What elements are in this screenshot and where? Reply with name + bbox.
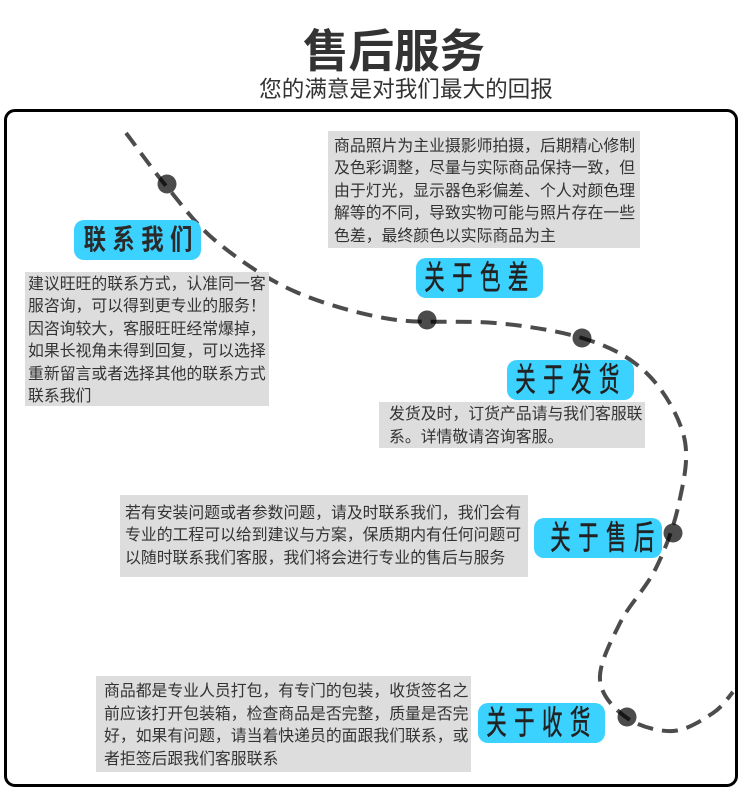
text block: receiving <box>96 676 471 772</box>
text block: contact us: 如果长视角未得到回复，可以选择 <box>28 343 266 360</box>
text block: receiving: 商品都是专业人员打包，有专门的包装，收货签名之 <box>104 683 468 700</box>
text block: contact us: 服咨询，可以得到更专业的服务！ <box>28 298 266 315</box>
badge: receiving: 关于收货 <box>486 704 597 741</box>
text block: receiving: 好，如果有问题，请当着快递员的面跟我们联系，或 <box>104 728 468 745</box>
text block: contact us: 建议旺旺的联系方式，认准同一客 <box>28 276 266 292</box>
text block: shipping: 发货及时，订货产品请与我们客服联 <box>389 406 643 422</box>
text block: colour difference: 解等的不同，导致实物可能与照片存在一些 <box>334 205 635 222</box>
text block: contact us: 重新留言或者选择其他的联系方式 <box>28 366 266 382</box>
text block: contact us: 联系我们 <box>28 388 91 405</box>
text block: colour difference: 色差，最终颜色以实际商品为主 <box>334 228 556 244</box>
text block: contact us <box>25 272 269 406</box>
text block: after-sales: 以随时联系我们客服，我们将会进行专业的售后与服务 <box>125 550 505 566</box>
text block: after-sales <box>120 495 528 577</box>
text block: colour difference <box>328 131 640 248</box>
text block: after-sales: 专业的工程可以给到建议与方案，保质期内有任何问题可 <box>125 527 521 544</box>
text block: after-sales: 若有安装问题或者参数问题，请及时联系我们，我们会有 <box>125 504 521 522</box>
text block: receiving: 前应该打开包装箱，检查商品是否完整，质量是否完 <box>104 706 468 722</box>
text block: shipping: 系。详情敬请咨询客服。 <box>389 428 563 446</box>
text block: colour difference: 及色彩调整，尽量与实际商品保持一致，但 <box>334 160 635 177</box>
subtitle: 您的满意是对我们最大的回报 <box>259 77 553 102</box>
badge: colour difference: 关于色差 <box>424 259 535 296</box>
title: 售后服务 <box>303 26 485 77</box>
badge: shipping: 关于发货 <box>515 361 626 398</box>
text block: shipping <box>379 402 645 448</box>
badge: after-sales: 关于售后 <box>550 519 661 556</box>
text block: colour difference: 商品照片为主业摄影师拍摄，后期精心修制 <box>334 138 635 154</box>
text block: receiving: 者拒签后跟我们客服联系 <box>104 750 278 768</box>
text block: colour difference: 由于灯光，显示器色彩偏差、个人对颜色理 <box>334 182 635 200</box>
text block: contact us: 因咨询较大，客服旺旺经常爆掉， <box>28 320 266 338</box>
badge: contact us: 联系我们 <box>83 224 198 255</box>
